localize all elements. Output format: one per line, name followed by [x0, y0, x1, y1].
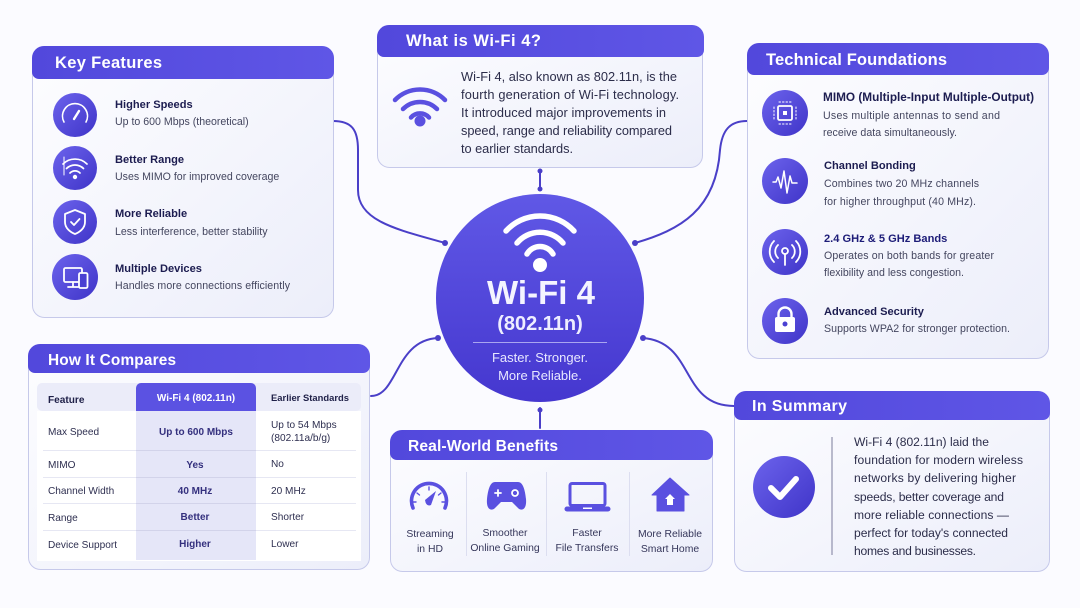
text block: definition: to earlier standards. — [461, 141, 573, 156]
feature: higher speeds: Up to 600 Mbps (theoretical) — [115, 116, 249, 128]
feature: more reliable: Less interference, better stability — [115, 226, 268, 238]
icon: devices — [52, 254, 98, 300]
benefit: online gaming: Online Gaming — [470, 543, 540, 554]
text block: summary: foundation for modern wireless — [854, 453, 1023, 467]
connectors between centre and panels — [333, 121, 747, 428]
feature: multiple devices — [115, 263, 291, 292]
text block: summary: Wi-Fi 4 (802.11n) laid the — [854, 435, 989, 449]
comparison table: Shorter — [271, 512, 305, 523]
benefit: streaming in hd — [406, 483, 454, 555]
comparison table: Device Support — [48, 540, 117, 551]
comparison table: 20 MHz — [271, 486, 306, 497]
heading: how it compares: How It Compares — [48, 352, 176, 369]
comparison table: Up to 600 Mbps — [159, 427, 233, 438]
feature: multiple devices: Handles more connections efficiently — [115, 280, 291, 292]
central tagline — [492, 350, 588, 383]
icon: wifi — [395, 89, 445, 126]
comparison table: Feature — [48, 395, 85, 406]
text block: summary: homes and businesses. — [854, 544, 976, 558]
text block: summary: perfect for today's connected — [854, 526, 1008, 540]
text block: definition: fourth generation of Wi-Fi technology. — [461, 87, 679, 102]
comparison table: Yes — [186, 460, 204, 471]
icon: padlock — [762, 298, 808, 344]
heading: in summary: In Summary — [752, 398, 847, 415]
item: mimo: MIMO (Multiple-Input Multiple-Output) — [823, 90, 1034, 104]
comparison table: (802.11a/b/g) — [271, 433, 330, 444]
central tagline: More Reliable. — [498, 368, 582, 383]
comparison table — [37, 383, 361, 561]
icon: wifi range — [53, 146, 97, 190]
feature: better range: Better Range — [115, 154, 184, 166]
central circle — [436, 194, 644, 402]
icon: signal wave — [762, 158, 808, 204]
benefit: smart home — [638, 478, 702, 555]
item: bands: Operates on both bands for greater — [824, 250, 994, 262]
comparison table: Earlier Standards — [271, 392, 349, 403]
item: advanced security: Advanced Security — [824, 306, 925, 318]
benefit: file transfers — [556, 484, 618, 554]
comparison table: No — [271, 459, 284, 470]
heading: what is wifi 4: What is Wi-Fi 4? — [406, 32, 541, 50]
feature: higher speeds — [115, 99, 249, 128]
feature: higher speeds: Higher Speeds — [115, 99, 193, 111]
item: advanced security — [824, 306, 1010, 335]
icon: central wifi — [506, 216, 574, 272]
benefit: online gaming — [470, 482, 540, 554]
comparison table: Channel Width — [48, 486, 114, 497]
comparison table: 40 MHz — [178, 486, 212, 497]
feature: better range — [115, 154, 279, 183]
icon: shield — [53, 200, 97, 244]
text block: definition: It introduced major improvements in — [461, 105, 666, 120]
feature: more reliable — [115, 208, 268, 238]
text block: definition — [461, 69, 679, 156]
benefit: streaming in hd: Streaming — [406, 529, 454, 540]
panel: key features — [32, 46, 334, 318]
central subtitle: (802.11n) — [497, 313, 583, 335]
central title: Wi-Fi 4 — [487, 274, 596, 311]
text block: definition: Wi-Fi 4, also known as 802.11n, is the — [461, 69, 677, 84]
text block: summary: speeds, better coverage and — [854, 490, 1004, 504]
benefit: smart home: Smart Home — [641, 544, 699, 555]
text block: summary — [854, 435, 1023, 558]
comparison table: Lower — [271, 539, 299, 550]
panel: real-world benefits — [390, 430, 713, 572]
icon: antenna — [762, 229, 808, 275]
heading: real-world benefits: Real-World Benefits — [408, 438, 558, 455]
icon: speedometer — [53, 93, 97, 137]
comparison table: Range — [48, 513, 78, 524]
item: channel bonding: Channel Bonding — [824, 160, 916, 172]
benefit: file transfers: Faster — [572, 528, 602, 539]
heading: key features: Key Features — [55, 54, 162, 72]
comparison table: Up to 54 Mbps — [271, 420, 337, 431]
item: bands — [824, 233, 994, 279]
comparison table: MIMO — [48, 460, 76, 471]
item: bands: flexibility and less congestion. — [824, 267, 964, 279]
panel: how it compares — [28, 344, 370, 570]
heading: technical foundations: Technical Foundations — [766, 51, 947, 69]
panel: in summary — [734, 391, 1050, 572]
item: mimo: Uses multiple antennas to send and — [823, 110, 1000, 122]
text block: definition: speed, range and reliability compared — [461, 123, 672, 138]
item: channel bonding: Combines two 20 MHz channels — [824, 178, 979, 190]
feature: more reliable: More Reliable — [115, 208, 187, 220]
comparison table: Better — [181, 512, 210, 523]
feature: multiple devices: Multiple Devices — [115, 263, 202, 275]
icon: check mark — [753, 456, 815, 518]
comparison table: Wi-Fi 4 (802.11n) — [157, 393, 235, 404]
panel: what is wifi 4 — [377, 25, 704, 168]
icon: chip — [762, 90, 808, 136]
comparison table: Higher — [179, 539, 211, 550]
item: advanced security: Supports WPA2 for stronger protection. — [824, 323, 1010, 335]
feature: better range: Uses MIMO for improved coverage — [115, 171, 279, 183]
item: channel bonding — [824, 160, 979, 208]
comparison table: Max Speed — [48, 427, 99, 438]
benefit: file transfers: File Transfers — [556, 543, 618, 554]
text block: summary: networks by delivering higher — [854, 471, 1016, 485]
item: mimo: receive data simultaneously. — [823, 127, 957, 139]
benefit: streaming in hd: in HD — [417, 544, 443, 555]
central tagline: Faster. Stronger. — [492, 350, 588, 365]
item: mimo — [823, 90, 1034, 139]
benefit: online gaming: Smoother — [482, 528, 528, 539]
item: channel bonding: for higher throughput (40 MHz). — [824, 196, 976, 208]
item: bands: 2.4 GHz & 5 GHz Bands — [824, 233, 947, 245]
text block: summary: more reliable connections — — [854, 508, 1010, 522]
benefit: smart home: More Reliable — [638, 529, 702, 540]
panel: technical foundations — [747, 43, 1049, 358]
